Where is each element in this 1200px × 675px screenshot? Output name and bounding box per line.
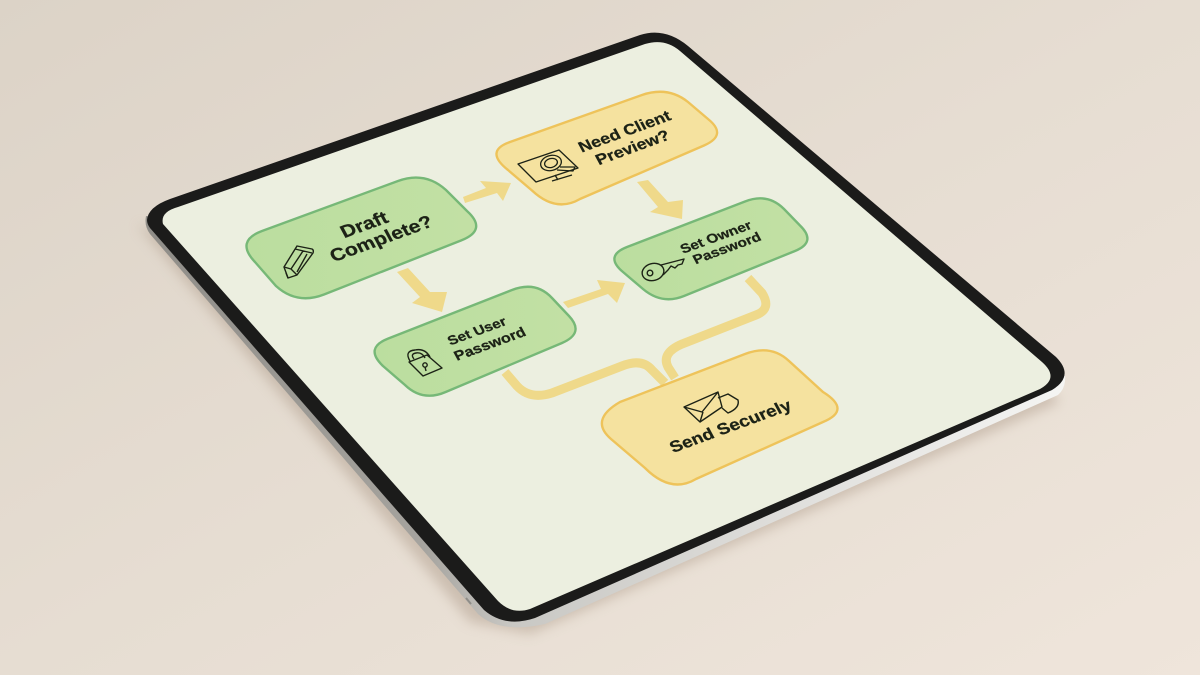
node: Set Owner Password <box>614 198 807 299</box>
arrow: draft to user password <box>397 268 447 312</box>
node: Set Owner Password: Password <box>690 230 764 268</box>
node: Set User Password: Password <box>451 324 529 364</box>
label: Draft Complete: Draft <box>337 208 392 242</box>
icon: padlock <box>408 350 442 376</box>
tablet side buttons <box>167 247 471 604</box>
arrow: client preview to owner password <box>637 180 683 219</box>
box: Set User Password <box>375 287 576 396</box>
arrow: user password to owner password <box>563 280 625 308</box>
tablet black bezel <box>147 33 1065 622</box>
node: Send Securely <box>602 350 838 484</box>
icon: pencil <box>284 246 313 278</box>
connector: user password to send securely <box>505 363 665 395</box>
node: Draft Complete: Complete? <box>326 212 436 266</box>
tablet screen <box>163 42 1051 611</box>
tablet silver edge <box>146 216 1065 627</box>
box: Set Owner Password <box>614 198 807 299</box>
tablet device <box>146 33 1065 627</box>
node: Set User Password <box>375 287 576 396</box>
node: Need Client Preview: Preview? <box>592 126 673 169</box>
label: Set Owner Password: Set Owner <box>678 218 755 257</box>
node: Draft Complete <box>246 178 476 298</box>
label: Set User Password: Set User <box>445 314 510 349</box>
icon: monitor with magnifier <box>518 150 578 182</box>
node: Need Client Preview <box>496 92 717 204</box>
box: Send Securely <box>602 350 838 484</box>
tablet shadow <box>138 225 1060 634</box>
box: Draft Complete <box>246 178 476 298</box>
arrow: draft to client preview <box>463 181 511 203</box>
label: Send Securely: Send Securely <box>666 396 795 456</box>
box: Need Client Preview <box>496 92 717 204</box>
connector: owner password to send securely <box>666 278 766 378</box>
icon: envelope with shield <box>684 392 738 422</box>
label: Need Client Preview: Need Client <box>575 107 674 156</box>
icon: key <box>640 259 684 283</box>
